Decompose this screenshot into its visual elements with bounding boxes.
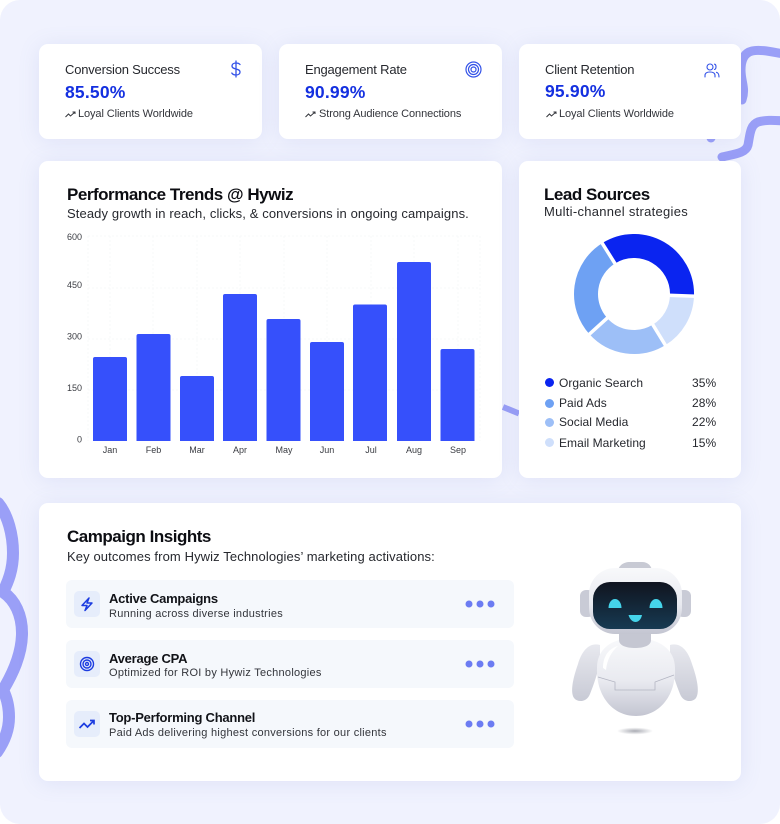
- head top cap: [618, 562, 652, 572]
- legend: social media: 22%: [692, 415, 716, 429]
- bars: [93, 262, 474, 441]
- menu dots: [466, 720, 494, 728]
- value: 90.99%: [305, 82, 366, 102]
- note: Strong Audience Connections: [319, 108, 461, 120]
- arms: [572, 644, 698, 701]
- shoulder highlight: [603, 646, 618, 670]
- subheading: Multi-channel strategies: [544, 204, 688, 219]
- subheading: Key outcomes from Hywiz Technologies’ marketing activations:: [67, 549, 435, 564]
- icon: target: [74, 651, 100, 677]
- segment: social media: [598, 326, 659, 342]
- subheading: Steady growth in reach, clicks, & conversions in ongoing campaigns.: [67, 206, 469, 221]
- floor shadow: [617, 728, 653, 734]
- legend: paid ads: 28%: [692, 396, 716, 410]
- row title: Active Campaigns: [109, 591, 218, 606]
- y axis labels: 150: [67, 383, 82, 393]
- eyes: [608, 599, 662, 608]
- x axis labels: Feb: [146, 445, 161, 455]
- x axis labels: Jul: [365, 445, 377, 455]
- legend: paid ads: [545, 396, 716, 410]
- row description: Paid Ads delivering highest conversions for our clients: [109, 727, 387, 739]
- insight row: average cpa: [66, 640, 514, 688]
- segment: email marketing: [659, 296, 682, 335]
- robot illustration: [572, 562, 698, 734]
- legend: social media: [545, 415, 716, 429]
- label: Client Retention: [545, 62, 634, 77]
- legend: social media: Social Media: [559, 415, 628, 429]
- x axis labels: Jan: [103, 445, 117, 455]
- legend: organic search: 35%: [692, 376, 716, 390]
- bar chart: [67, 232, 474, 455]
- icon: trend: [65, 112, 76, 118]
- visor screen: [593, 582, 677, 629]
- panel: campaign insights: [39, 503, 741, 781]
- head shell: [589, 568, 682, 634]
- icon: trend: [546, 112, 556, 118]
- legend: organic search: [545, 376, 716, 390]
- menu dots: [466, 660, 494, 668]
- x axis labels: Mar: [189, 445, 205, 455]
- body seam: [598, 675, 674, 690]
- icon: dollar: [231, 60, 241, 78]
- icon: trend up: [74, 711, 100, 737]
- legend: organic search: Organic Search: [559, 376, 643, 390]
- body: [597, 638, 675, 716]
- x axis labels: Jun: [320, 445, 334, 455]
- icon: trend: [305, 112, 316, 118]
- note: Loyal Clients Worldwide: [559, 108, 674, 120]
- stat card: engagement rate: [279, 44, 502, 139]
- y axis labels: [67, 232, 82, 444]
- ears: [580, 590, 691, 617]
- legend: email marketing: Email Marketing: [559, 436, 646, 450]
- neck: [619, 630, 651, 648]
- segment: organic search: [609, 246, 682, 296]
- row description: Running across diverse industries: [109, 608, 283, 620]
- menu dots: [466, 600, 494, 608]
- note: Loyal Clients Worldwide: [78, 108, 193, 120]
- y axis labels: 0: [77, 434, 82, 444]
- legend: paid ads: Paid Ads: [559, 396, 607, 410]
- x axis labels: Sep: [450, 445, 466, 455]
- y axis labels: 450: [67, 280, 82, 290]
- x axis labels: May: [275, 445, 293, 455]
- panel: lead sources: [519, 161, 741, 478]
- legend: email marketing: 15%: [692, 436, 716, 450]
- stat card: client retention: [519, 44, 741, 139]
- legend: [545, 376, 716, 450]
- value: 85.50%: [65, 82, 126, 102]
- y axis labels: 300: [67, 332, 82, 342]
- icon: lightning: [74, 591, 100, 617]
- legend: email marketing: [545, 436, 716, 450]
- label: Engagement Rate: [305, 62, 407, 77]
- heading: Campaign Insights: [67, 527, 211, 546]
- heading: Performance Trends @ Hywiz: [67, 185, 293, 204]
- segment gaps: [588, 241, 696, 347]
- mouth: [628, 615, 642, 622]
- stat card: conversion success: [39, 44, 262, 139]
- insight row: active campaigns: [66, 580, 514, 628]
- heading: Lead Sources: [544, 185, 650, 204]
- x axis labels: Aug: [406, 445, 422, 455]
- label: Conversion Success: [65, 62, 180, 77]
- insight row: top-performing channel: [66, 700, 514, 748]
- row description: Optimized for ROI by Hywiz Technologies: [109, 667, 322, 679]
- segment: paid ads: [586, 253, 609, 326]
- value: 95.90%: [545, 81, 606, 101]
- row title: Average CPA: [109, 651, 187, 666]
- icon: users: [704, 64, 720, 78]
- icon: target: [465, 61, 482, 78]
- donut chart: [574, 234, 694, 354]
- y axis labels: 600: [67, 232, 82, 242]
- panel: performance trends: [39, 161, 502, 478]
- x axis labels: Apr: [233, 445, 247, 455]
- x axis labels: [103, 445, 466, 455]
- row title: Top-Performing Channel: [109, 710, 255, 725]
